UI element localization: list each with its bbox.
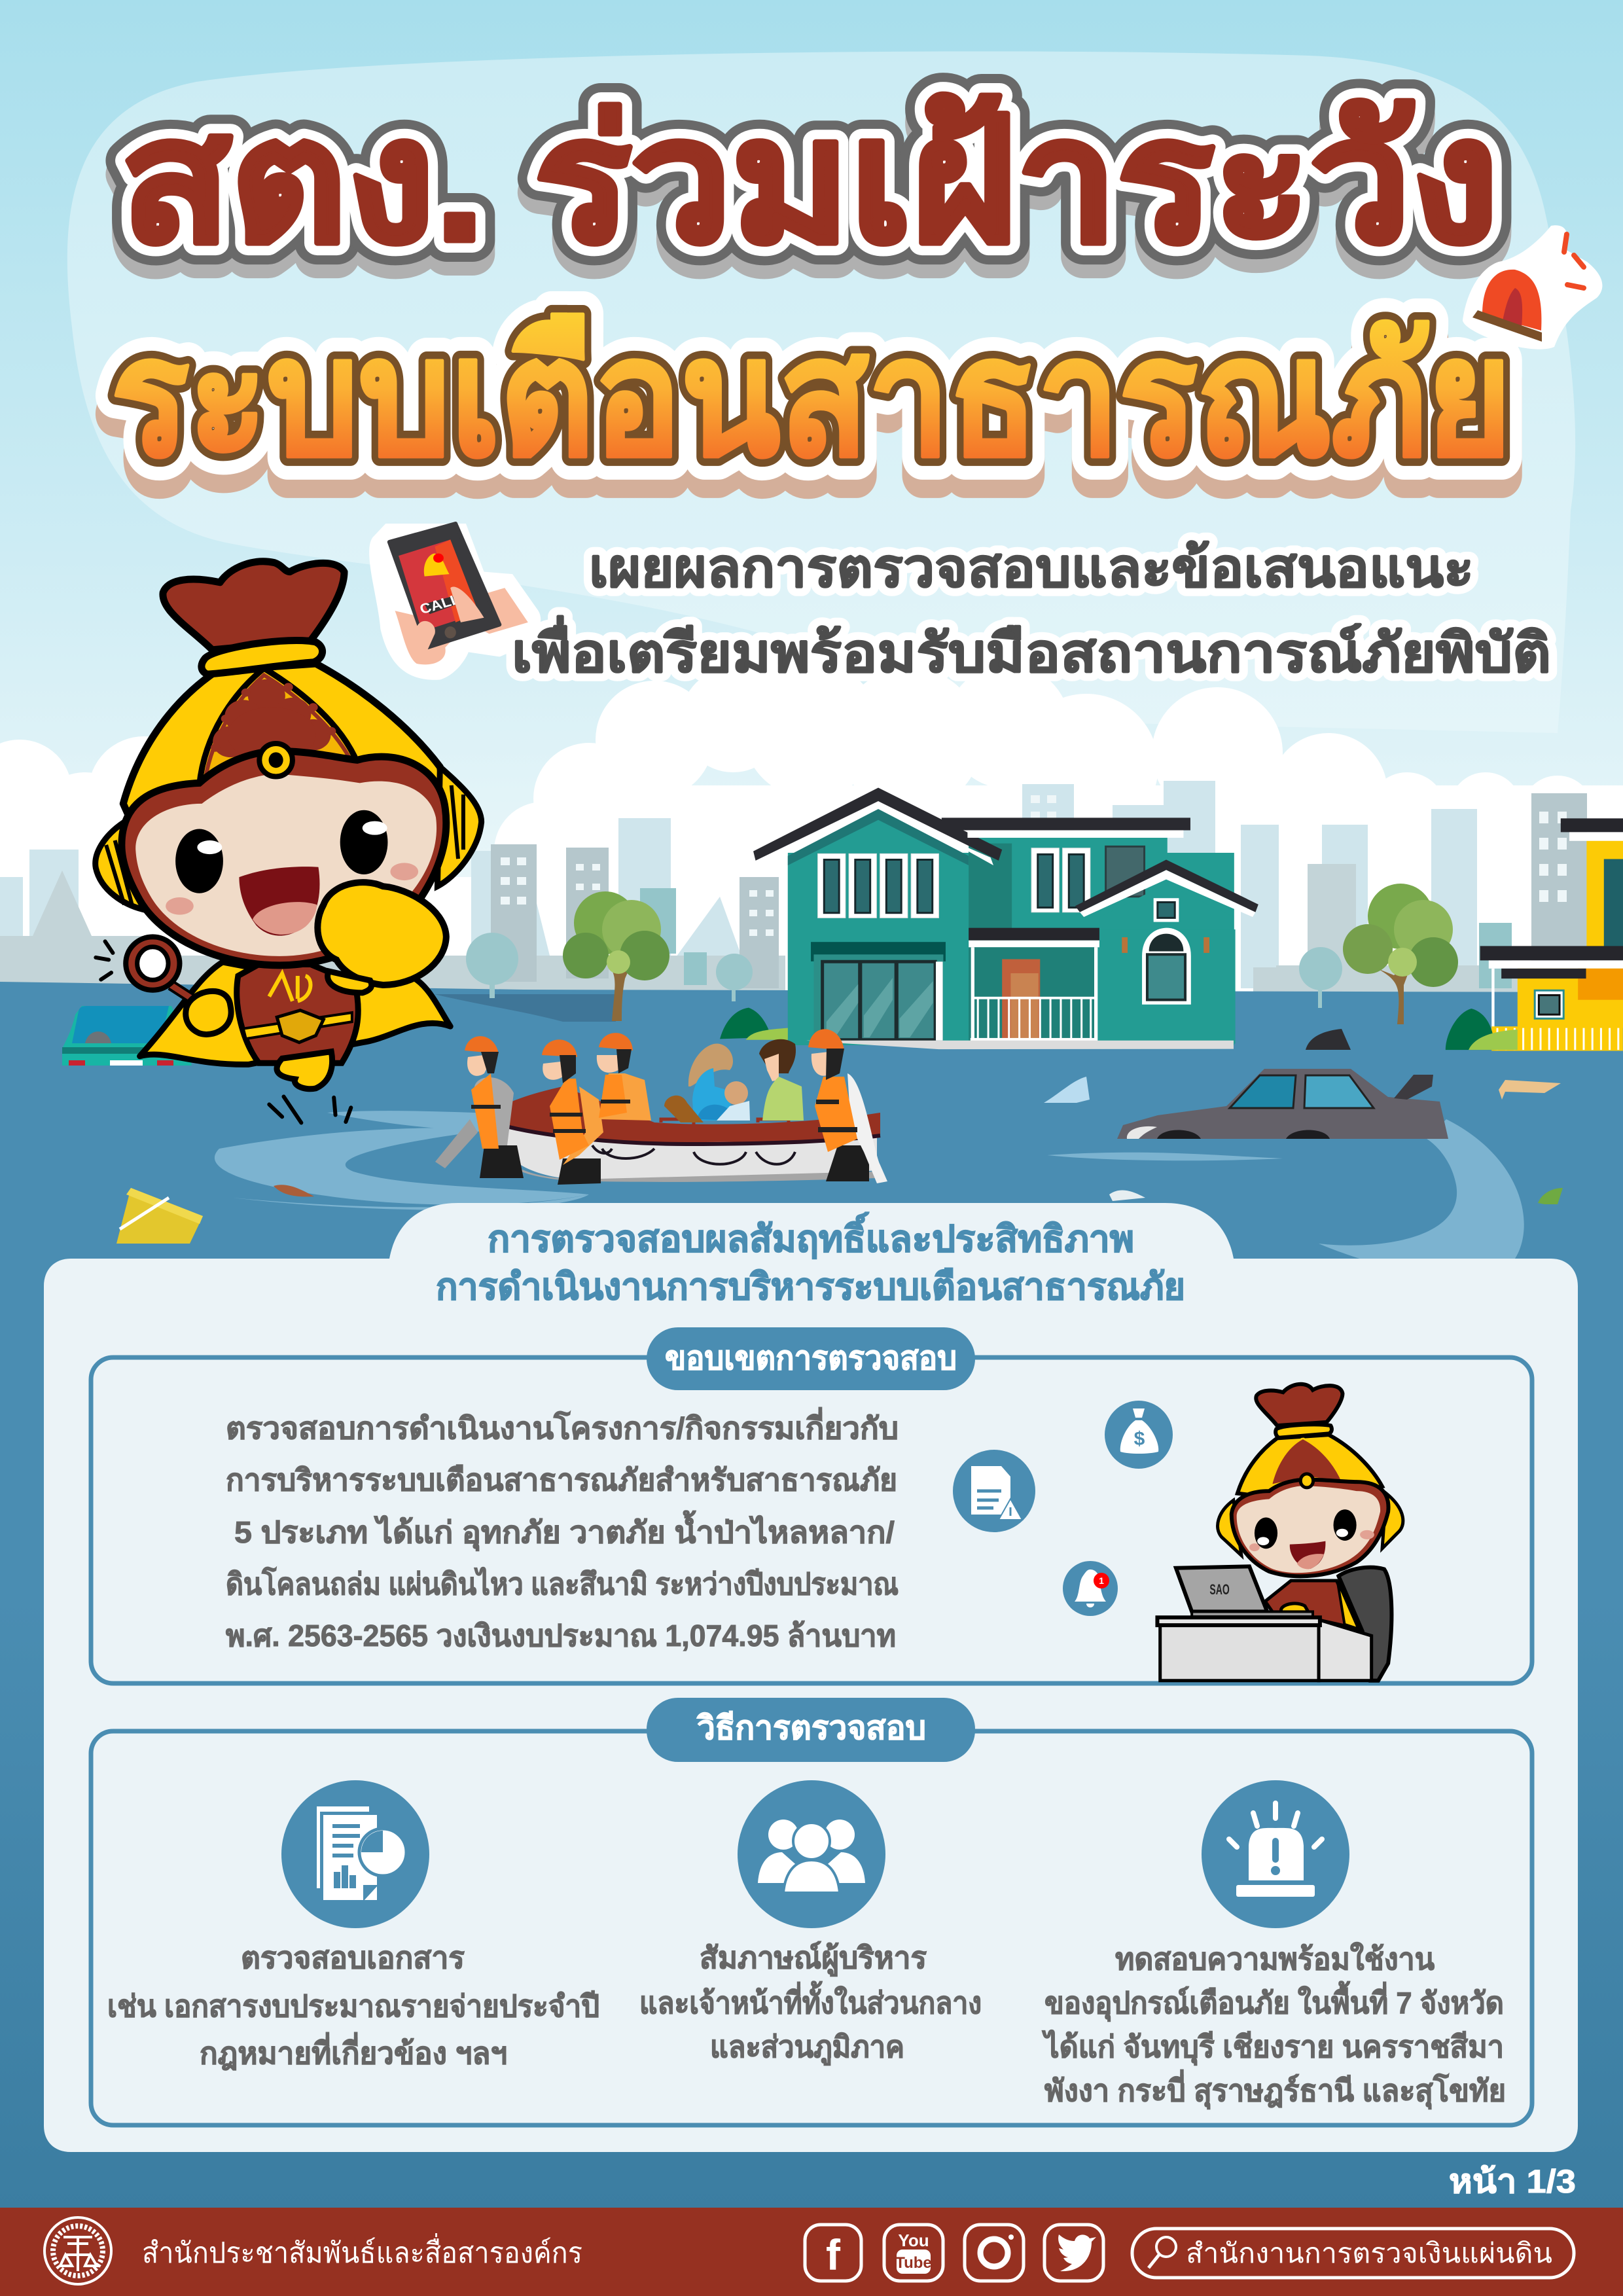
scope body text: ดินโคลนถล่ม แผ่นดินไหว และสึนามิ ระหว่างปีงบประมาณ <box>226 1566 899 1601</box>
method 2 text: และส่วนภูมิภาค <box>710 2030 904 2066</box>
scope pill heading <box>647 1327 975 1390</box>
title line 1: สตง. ร่วมเฝ้าระวัง <box>121 99 1499 291</box>
mascot face <box>135 774 437 956</box>
subtitle line 2: เพื่อเตรียมพร้อมรับมือสถานการณ์ภัยพิบัติ <box>512 615 1551 683</box>
water ripples <box>215 1111 1524 1279</box>
icon: people <box>738 1780 885 1928</box>
icon: siren <box>1202 1780 1349 1928</box>
method 1 text: ตรวจสอบเอกสาร <box>241 1941 465 1975</box>
icon: document warning <box>953 1450 1035 1532</box>
crest <box>1271 1438 1342 1485</box>
icon: money bag <box>1105 1401 1173 1469</box>
small gable <box>1100 884 1234 1044</box>
laptop <box>1176 1566 1313 1617</box>
bushes beside house <box>720 1008 772 1039</box>
scope body text <box>226 1407 899 1653</box>
method 2 text: และเจ้าหน้าที่ทั้งในส่วนกลาง <box>639 1981 982 2020</box>
scope body text: การบริหารระบบเตือนสาธารณภัยสำหรับสาธารณภัย <box>226 1463 897 1497</box>
phone with hand icon <box>369 524 541 680</box>
mascot bag top <box>163 562 344 650</box>
search pill: สำนักงานการตรวจเงินแผ่นดิน <box>1186 2238 1552 2269</box>
method pill heading: วิธีการตรวจสอบ <box>696 1710 926 1746</box>
mascot crest <box>200 668 357 785</box>
arched window <box>1142 928 1191 1005</box>
icon: youtube <box>884 2225 943 2281</box>
panel heading: การดำเนินงานการบริหารระบบเตือนสาธารณภัย <box>436 1266 1185 1307</box>
desk <box>1157 1617 1372 1681</box>
organization seal <box>45 2217 111 2284</box>
porch <box>969 928 1099 941</box>
floating debris <box>274 1029 1563 1204</box>
panel: audit method <box>91 1698 1532 2125</box>
laptop: SAO <box>1209 1581 1230 1598</box>
subtitle line 1: เผยผลการตรวจสอบและข้อเสนอแนะ <box>589 539 1474 598</box>
tree left <box>563 891 669 1021</box>
family in boat <box>664 1039 804 1122</box>
eye highlights <box>1257 1529 1348 1545</box>
mascot eyes <box>175 810 387 893</box>
main mascot <box>96 562 482 1122</box>
method 2 text: สัมภาษณ์ผู้บริหาร <box>700 1941 927 1977</box>
mascot helmet <box>123 664 450 817</box>
cape <box>1338 1581 1359 1629</box>
head <box>1232 1480 1389 1576</box>
page number: หน้า 1/3 <box>1449 2163 1576 2200</box>
footer office name: สำนักประชาสัมพันธ์และสื่อสารองค์กร <box>142 2233 582 2269</box>
face <box>1237 1486 1380 1573</box>
title line 1: สตง. ร่วมเฝ้าระวัง <box>121 85 1499 277</box>
rescuer 3 <box>597 1033 651 1121</box>
search pill <box>1132 2229 1574 2278</box>
mascot mouth <box>239 867 319 936</box>
rescuer 1 <box>435 1036 524 1178</box>
background sky <box>0 0 1623 995</box>
icon: instagram <box>965 2225 1024 2281</box>
method 3 text <box>1041 1941 1506 2109</box>
body <box>1265 1581 1359 1629</box>
rescue boat <box>488 1086 880 1182</box>
phone with hand icon: CALL <box>418 591 462 617</box>
mascot body <box>237 964 358 1089</box>
scope box border <box>91 1357 1532 1683</box>
mascot head <box>122 751 446 965</box>
ears <box>1218 1494 1403 1555</box>
panel heading <box>436 1212 1185 1307</box>
rescuer 2 <box>542 1039 603 1185</box>
small trees <box>466 933 1342 1008</box>
icon: facebook: f <box>826 2231 841 2279</box>
method 3 text: ของอุปกรณ์เตือนภัย ในพื้นที่ 7 จังหวัด <box>1044 1981 1504 2022</box>
mouth <box>1290 1541 1325 1569</box>
icon: bell: 1 <box>1099 1575 1104 1586</box>
mascot gem <box>259 744 293 777</box>
main white panel <box>44 1203 1578 2152</box>
bucket in water <box>116 1188 203 1244</box>
clouds <box>0 661 1623 995</box>
method pill heading <box>647 1698 975 1762</box>
mascot wrist <box>328 971 372 993</box>
cheeks <box>1249 1530 1374 1551</box>
scope pill heading: ขอบเขตการตรวจสอบ <box>665 1340 957 1376</box>
tongue <box>1297 1554 1324 1569</box>
hand <box>1281 1604 1309 1613</box>
scope body text: 5 ประเภท ได้แก่ อุทกภัย วาตภัย น้ำป่าไหลหลาก/ <box>234 1510 895 1551</box>
green teal flooded car <box>62 1006 192 1066</box>
panel: audit scope <box>91 1327 1532 1683</box>
chair <box>1338 1568 1391 1681</box>
city skyline <box>0 781 1623 995</box>
method 1 text: เช่น เอกสารงบประมาณรายจ่ายประจำปี <box>107 1989 599 2023</box>
band <box>1275 1424 1332 1438</box>
mascot cheeks <box>166 863 418 915</box>
method 2 text <box>639 1941 982 2066</box>
icon: youtube: You <box>898 2231 929 2250</box>
flood water <box>0 982 1623 2212</box>
subtitle line 2: เพื่อเตรียมพร้อมรับมือสถานการณ์ภัยพิบัติ <box>512 615 1551 683</box>
title line 1: สตง. ร่วมเฝ้าระวัง <box>121 85 1499 277</box>
windows <box>818 848 1090 918</box>
method 3 text: ทดสอบความพร้อมใช้งาน <box>1115 1941 1435 1976</box>
mascot magnifier <box>96 937 351 1122</box>
method 1 text <box>107 1941 599 2070</box>
icon: facebook <box>805 2225 861 2281</box>
teal house <box>720 788 1258 1049</box>
dark water strip <box>435 994 616 1022</box>
helmet <box>1238 1435 1382 1503</box>
mascot fist <box>317 882 446 985</box>
small mascot at laptop <box>1157 1384 1403 1681</box>
icon: money bag: $ <box>1134 1428 1145 1450</box>
bag top <box>1256 1384 1342 1426</box>
icon: bell <box>1063 1561 1118 1616</box>
footer bar <box>0 2208 1623 2296</box>
method 3 text: พังงา กระบี่ สุราษฎร์ธานี และสุโขทัย <box>1044 2070 1506 2109</box>
rescuer 4 <box>808 1029 887 1183</box>
method 3 text: ได้แก่ จันทบุรี เชียงราย นครราชสีมา <box>1041 2030 1504 2066</box>
background speech cloud <box>67 51 1575 733</box>
mascot bag band <box>202 640 323 674</box>
flooded grey car <box>1117 1069 1448 1139</box>
scope body text: พ.ศ. 2563-2565 วงเงินงบประมาณ 1,074.95 ล้านบาท <box>226 1619 896 1653</box>
mascot cape <box>140 962 450 1064</box>
mascot ears <box>96 767 482 909</box>
panel heading: การตรวจสอบผลสัมฤทธิ์และประสิทธิภาพ <box>488 1212 1134 1259</box>
icon: documents and chart <box>281 1780 429 1928</box>
icon: youtube: Tube <box>895 2254 932 2272</box>
eyes <box>1255 1509 1357 1549</box>
icon: twitter <box>1044 2225 1103 2281</box>
siren icon <box>1463 225 1602 350</box>
method box border <box>91 1731 1532 2125</box>
yellow house <box>1446 818 1623 1051</box>
title line 1: สตง. ร่วมเฝ้าระวัง <box>121 85 1499 277</box>
gem <box>1300 1474 1313 1488</box>
garage door <box>811 942 946 961</box>
subtitle line 1: เผยผลการตรวจสอบและข้อเสนอแนะ <box>589 539 1474 598</box>
method 1 text: กฎหมายที่เกี่ยวข้อง ฯลฯ <box>200 2032 507 2070</box>
tree right <box>1343 884 1458 1024</box>
scope body text: ตรวจสอบการดำเนินงานโครงการ/กิจกรรมเกี่ยวกับ <box>226 1407 899 1445</box>
